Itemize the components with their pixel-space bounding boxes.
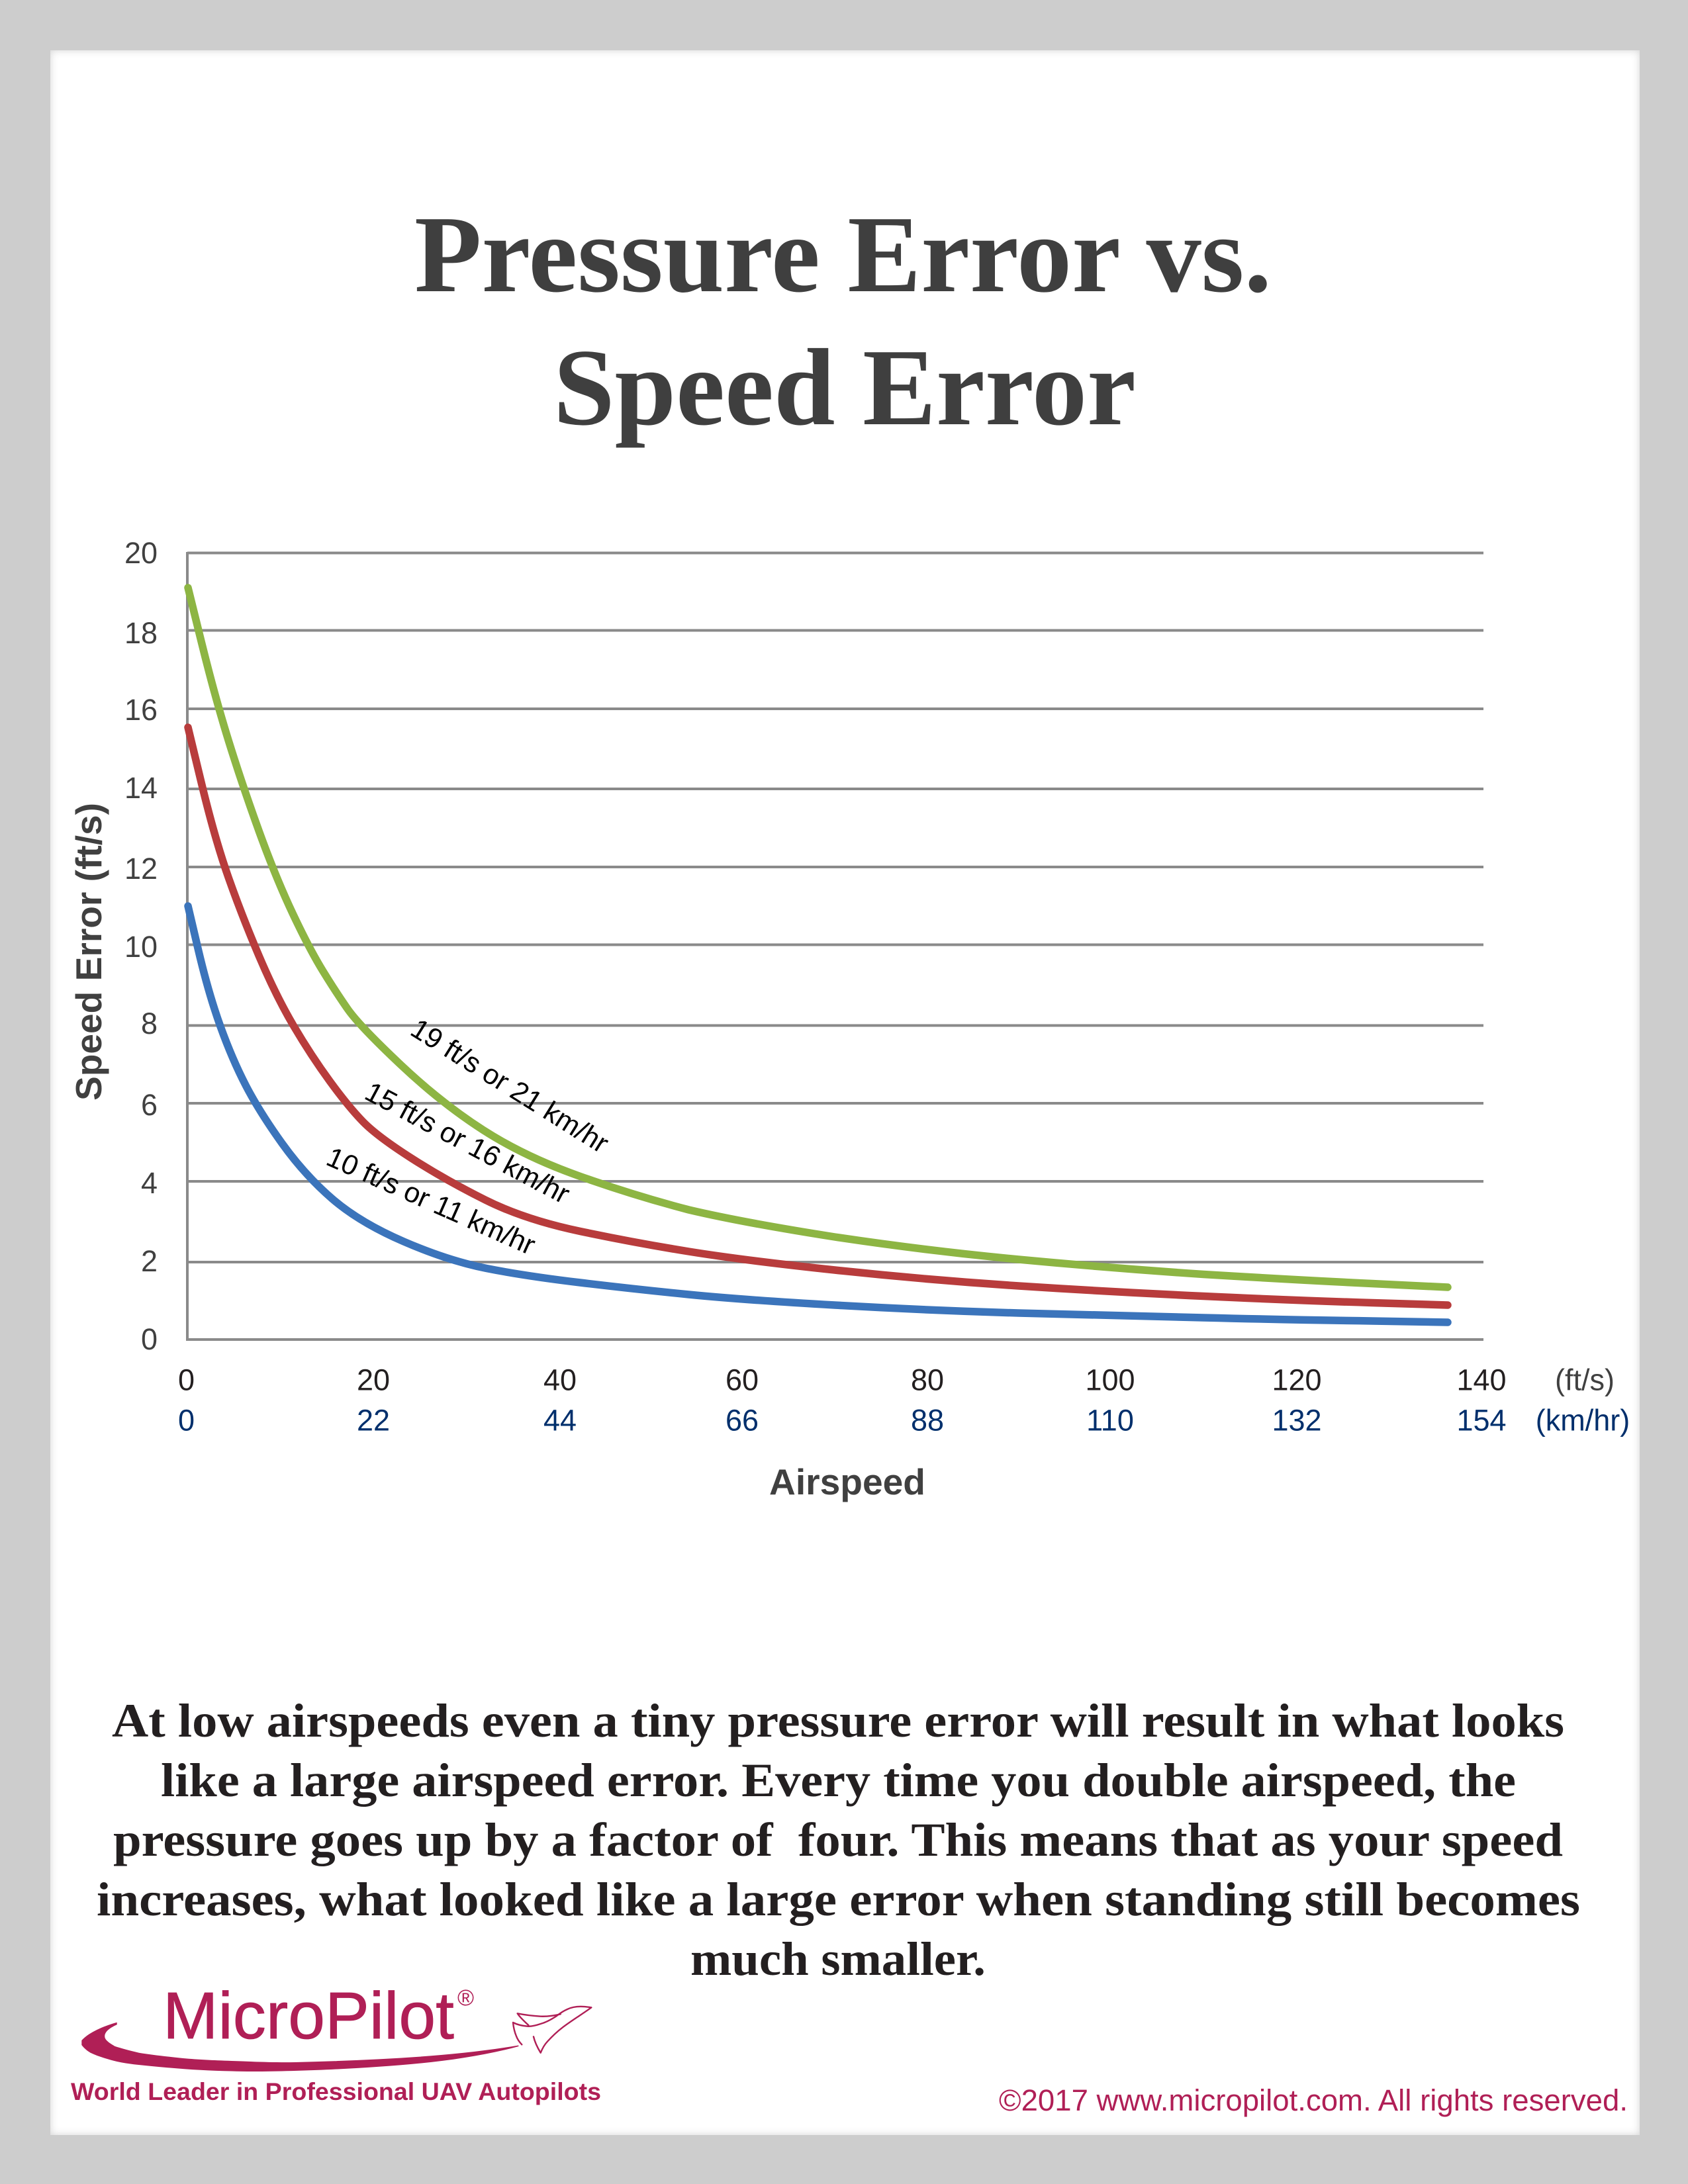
- y axis tick labels: 14: [124, 771, 158, 805]
- curve: 19 ft/s (green): [188, 588, 1448, 1287]
- y axis tick labels: 20: [124, 536, 158, 570]
- x axis labels: km/hr: 22: [357, 1403, 390, 1437]
- curve: 15 ft/s (red): [188, 727, 1448, 1305]
- curve label: 15 ft/s: 15 ft/s or 16 km/hr: [360, 1076, 575, 1210]
- curve label: 19 ft/s: 19 ft/s or 21 km/hr: [405, 1013, 614, 1160]
- logo tagline: World Leader in Professional UAV Autopilots: [71, 2078, 601, 2105]
- line chart: speed error vs airspeed: [68, 536, 1630, 1502]
- logo plane icon: [513, 2007, 591, 2053]
- explanatory text block: pressure goes up by a factor of four. This means that as your speed: [113, 1813, 1563, 1866]
- y axis tick labels: 18: [124, 616, 158, 650]
- x axis labels: ft/s: 80: [911, 1363, 944, 1396]
- title: [414, 193, 1272, 448]
- x axis labels: km/hr: 44: [543, 1403, 577, 1437]
- x axis labels: km/hr: 0: [178, 1403, 195, 1437]
- explanatory text block: much smaller.: [690, 1933, 986, 1985]
- x axis labels: ft/s: (ft/s): [1555, 1363, 1615, 1396]
- y axis tick labels: 16: [124, 693, 158, 727]
- x axis labels: ft/s: 0: [178, 1363, 195, 1396]
- y axis tick labels: 0: [141, 1322, 158, 1356]
- logo: MicroPilot: [71, 1979, 601, 2105]
- x axis labels: km/hr: 110: [1086, 1403, 1134, 1437]
- x axis labels: km/hr: (km/hr): [1536, 1403, 1630, 1437]
- y axis tick labels: 6: [141, 1088, 158, 1122]
- x axis labels: ft/s: 40: [543, 1363, 577, 1396]
- y axis tick labels: 10: [124, 930, 158, 964]
- x axis labels: ft/s: 100: [1085, 1363, 1135, 1396]
- explanatory text block: At low airspeeds even a tiny pressure error will result in what looks: [112, 1694, 1564, 1747]
- x axis labels: ft/s: 120: [1272, 1363, 1322, 1396]
- copyright line: ©2017 www.micropilot.com. All rights reserved.: [999, 2083, 1628, 2117]
- y axis tick labels: 4: [141, 1166, 158, 1200]
- explanatory text block: increases, what looked like a large error when standing still becomes: [97, 1873, 1580, 1926]
- x axis labels: km/hr: 154: [1456, 1403, 1507, 1437]
- x axis title: Airspeed: [769, 1461, 925, 1502]
- explanatory text block: [97, 1694, 1580, 1985]
- curve: 10 ft/s (blue): [188, 906, 1448, 1322]
- x axis labels: km/hr: 88: [911, 1403, 944, 1437]
- logo swoosh: [81, 2023, 519, 2071]
- x axis labels: km/hr: 66: [726, 1403, 759, 1437]
- x axis labels: km/hr: 132: [1272, 1403, 1322, 1437]
- curve label: 10 ft/s: 10 ft/s or 11 km/hr: [322, 1142, 539, 1261]
- y axis tick labels: 2: [141, 1244, 158, 1278]
- y axis tick labels: 8: [141, 1007, 158, 1040]
- x axis labels: ft/s: 140: [1456, 1363, 1507, 1396]
- y axis tick labels: 12: [124, 852, 158, 886]
- y axis tick labels: [124, 536, 158, 1356]
- logo wordmark: MicroPilot: [163, 1979, 454, 2053]
- x axis labels: km/hr: [178, 1403, 1630, 1437]
- x axis labels: ft/s: 60: [726, 1363, 759, 1396]
- title: Speed Error: [553, 326, 1136, 448]
- explanatory text block: like a large airspeed error. Every time you double airspeed, the: [161, 1754, 1516, 1807]
- y axis title: Speed Error (ft/s): [68, 803, 109, 1101]
- logo registered mark: ®: [457, 1985, 474, 2011]
- x axis labels: ft/s: 20: [357, 1363, 390, 1396]
- x axis labels: ft/s: [178, 1363, 1615, 1396]
- title: Pressure Error vs.: [414, 193, 1272, 315]
